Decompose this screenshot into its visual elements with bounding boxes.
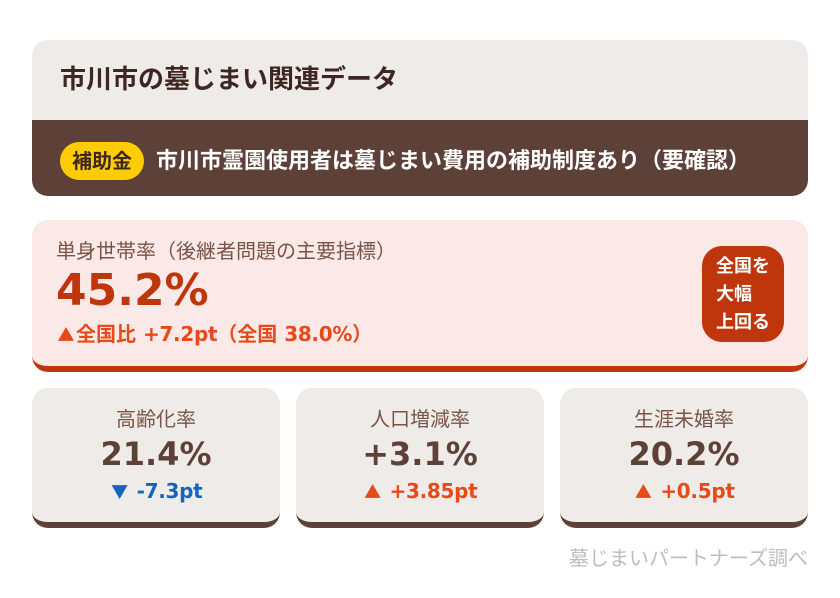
main value: 45.2% (56, 265, 209, 316)
title: 市川市の墓じまい関連データ (60, 65, 398, 95)
badge: far above national: 上回る (716, 312, 770, 333)
badge: far above national (702, 246, 784, 342)
badge: far above national: 大幅 (716, 284, 752, 305)
delta: -7.3pt (137, 479, 202, 503)
value: 20.2% (628, 435, 740, 473)
delta (111, 478, 202, 503)
value: 21.4% (100, 435, 212, 473)
card: lifetime unmarried rate (560, 388, 808, 528)
card: aging rate (32, 388, 280, 528)
subsidy banner (32, 120, 808, 196)
value: +3.1% (362, 435, 478, 473)
card: population change (296, 388, 544, 528)
badge: subsidy (60, 142, 144, 180)
delta: +3.85pt (390, 479, 477, 503)
label: 人口増減率 (370, 407, 470, 431)
badge: subsidy: 補助金 (72, 149, 132, 173)
panel: single household rate (32, 220, 808, 372)
header panel (32, 40, 808, 196)
delta: ▲ (364, 478, 381, 503)
comparison: 全国比 +7.2pt（全国 38.0%） (76, 322, 372, 346)
delta: +0.5pt (660, 479, 735, 503)
source: 墓じまいパートナーズ調べ (569, 546, 808, 570)
subsidy text: 市川市霊園使用者は墓じまい費用の補助制度あり（要確認） (156, 149, 750, 174)
label: 単身世帯率（後継者問題の主要指標） (56, 239, 396, 263)
delta: ▼ (111, 478, 128, 503)
label: 高齢化率 (116, 407, 196, 431)
comparison: ▲ (58, 321, 74, 346)
delta: ▲ (635, 478, 652, 503)
badge: far above national: 全国を (716, 256, 770, 277)
label: 生涯未婚率 (634, 407, 734, 431)
